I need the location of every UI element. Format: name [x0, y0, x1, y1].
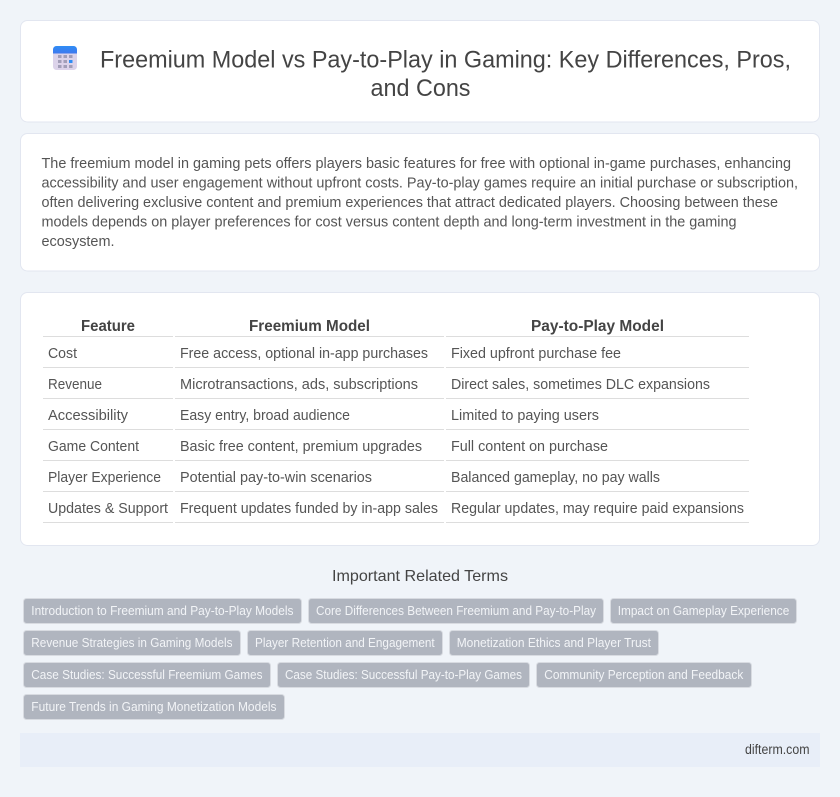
tag: [24, 694, 284, 720]
tag: Core Differences Between Freemium and Pay-to-Play: [316, 604, 597, 618]
footer: [20, 733, 820, 767]
tag: Future Trends in Gaming Monetization Models: [31, 700, 276, 714]
table row: cost: Fixed upfront purchase fee: [451, 346, 621, 362]
tag: [450, 630, 658, 656]
text block: introduction paragraph: [42, 156, 798, 250]
heading: important related terms: Important Related Terms: [332, 568, 508, 585]
panel: related term tags: [24, 598, 796, 720]
title: and Cons: [370, 75, 470, 102]
text block: introduction paragraph: ecosystem.: [42, 234, 114, 250]
table row: cost: Free access, optional in-app purchases: [180, 346, 428, 362]
tag: [24, 598, 302, 624]
title: Freemium Model vs Pay-to-Play in Gaming: Key Differences, Pros,: [100, 46, 791, 74]
table header row: Feature: [81, 318, 135, 335]
table row: player experience: Balanced gameplay, no pay walls: [451, 470, 660, 486]
table row: revenue: Microtransactions, ads, subscriptions: [180, 377, 418, 393]
table row: cost: Cost: [48, 346, 77, 362]
text block: introduction paragraph: models depends on player preferences for cost versus content depth and long-term investment in the gaming: [42, 214, 736, 230]
table header row: Pay-to-Play Model: [531, 318, 664, 335]
title: [100, 46, 791, 102]
text block: introduction paragraph: often delivering exclusive content and premium experiences that attract dedicated players. Choosing between these: [42, 195, 778, 211]
tag: Community Perception and Feedback: [544, 668, 744, 682]
table row: game content: Full content on purchase: [451, 439, 608, 455]
table row: updates and support: Frequent updates funded by in-app sales: [180, 501, 438, 517]
table row: revenue: Direct sales, sometimes DLC expansions: [451, 377, 710, 393]
table row: game content: Basic free content, premium upgrades: [180, 439, 422, 455]
table row: accessibility: Limited to paying users: [451, 408, 599, 424]
icon: calendar: [53, 46, 77, 70]
table row: accessibility: [48, 408, 599, 424]
table row: updates and support: Regular updates, may require paid expansions: [451, 501, 744, 517]
table row: player experience: [48, 470, 660, 486]
table row: cost: [48, 346, 621, 362]
tag: [536, 662, 752, 688]
table header row: Freemium Model: [249, 318, 370, 335]
table row: accessibility: Accessibility: [48, 408, 129, 424]
tag: [24, 662, 270, 688]
table row: player experience: Potential pay-to-win scenarios: [180, 470, 372, 486]
tag: Player Retention and Engagement: [255, 636, 435, 650]
table row: revenue: [48, 377, 710, 393]
text block: introduction paragraph: The freemium model in gaming pets offers players basic features for free with optional in-game purchases, enhancing: [42, 156, 791, 172]
tag: Revenue Strategies in Gaming Models: [31, 636, 232, 650]
panel: title header: [20, 20, 820, 122]
tag: Monetization Ethics and Player Trust: [457, 636, 652, 650]
table row: game content: [48, 439, 608, 455]
tag: Introduction to Freemium and Pay-to-Play Models: [31, 604, 294, 618]
tag: Case Studies: Successful Pay-to-Play Games: [285, 668, 522, 682]
tag: [24, 630, 240, 656]
footer: difterm.com: [745, 742, 810, 757]
table row: revenue: Revenue: [48, 377, 102, 393]
table row: player experience: Player Experience: [48, 470, 161, 486]
table row: updates and support: Updates & Support: [48, 501, 168, 517]
tag: [308, 598, 604, 624]
table row: accessibility: Easy entry, broad audience: [180, 408, 350, 424]
tag: [248, 630, 442, 656]
panel: introduction: [20, 134, 820, 271]
table row: game content: Game Content: [48, 439, 139, 455]
panel: comparison table: [20, 292, 820, 546]
table header row: [81, 318, 664, 335]
tag: Impact on Gameplay Experience: [618, 604, 789, 618]
table row: updates and support: [48, 501, 744, 517]
tag: Case Studies: Successful Freemium Games: [31, 668, 262, 682]
tag: [278, 662, 530, 688]
text block: introduction paragraph: accessibility and user engagement without upfront costs. Pay-to-play games require an initial purchase or subscription,: [42, 176, 798, 192]
tag: [610, 598, 796, 624]
